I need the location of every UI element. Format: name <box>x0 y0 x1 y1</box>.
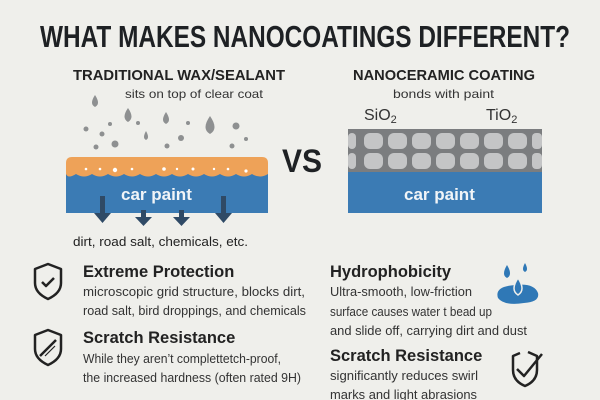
icon: water droplets <box>84 95 248 150</box>
panel: nanoceramic <box>348 67 542 213</box>
block: hydrophobicity: and slide off, carrying dirt and dust <box>330 324 528 338</box>
block: hydrophobicity: Ultra-smooth, low-friction <box>330 285 472 299</box>
label: car paint: car paint <box>121 185 192 204</box>
wax layer <box>66 157 268 176</box>
heading: nanoceramic: NANOCERAMIC COATING <box>353 67 535 84</box>
block: extreme protection: road salt, bird droppings, and chemicals <box>83 304 306 318</box>
subtitle: sits on top: sits on top of clear coat <box>125 87 264 101</box>
caption: dirt: dirt, road salt, chemicals, etc. <box>73 235 248 249</box>
block: extreme protection: Extreme Protection <box>83 263 234 281</box>
icon: shield slash <box>35 330 61 365</box>
icon: water drops <box>497 263 538 304</box>
arrows: penetration <box>94 196 232 226</box>
block: extreme protection <box>83 263 306 318</box>
car paint layer <box>66 172 268 213</box>
block: extreme protection: microscopic grid structure, blocks dirt, <box>83 285 305 299</box>
block: scratch resistance left: While they aren’t complettetch-proof, <box>83 352 281 366</box>
label: car paint right: car paint <box>404 185 475 204</box>
icon: shield check <box>35 264 61 299</box>
icon: shield check right <box>513 352 542 386</box>
label: SiO2: 2 <box>391 114 397 126</box>
block: scratch resistance right <box>330 347 482 400</box>
panel: traditional wax <box>66 67 285 249</box>
block: scratch resistance left: the increased hardness (often rated 9H) <box>83 371 301 385</box>
nanoparticle layer <box>348 129 542 172</box>
block: scratch resistance right: Scratch Resistance <box>330 347 482 365</box>
block: scratch resistance left: Scratch Resistance <box>83 329 235 347</box>
heading: traditional: TRADITIONAL WAX/SEALANT <box>73 67 285 84</box>
block: hydrophobicity: Hydrophobicity <box>330 263 452 281</box>
VS: VS <box>282 143 322 179</box>
label: TiO2: 2 <box>511 114 517 126</box>
block: scratch resistance left <box>83 329 301 385</box>
block: hydrophobicity: surface causes water t bead up <box>330 305 492 319</box>
car paint layer right <box>348 172 542 213</box>
label: SiO2: SiO <box>364 107 391 124</box>
block: scratch resistance right: significantly reduces swirl <box>330 369 478 383</box>
block: hydrophobicity <box>330 263 528 338</box>
label: TiO2: TiO <box>486 107 511 124</box>
subtitle: bonds: bonds with paint <box>393 87 495 101</box>
